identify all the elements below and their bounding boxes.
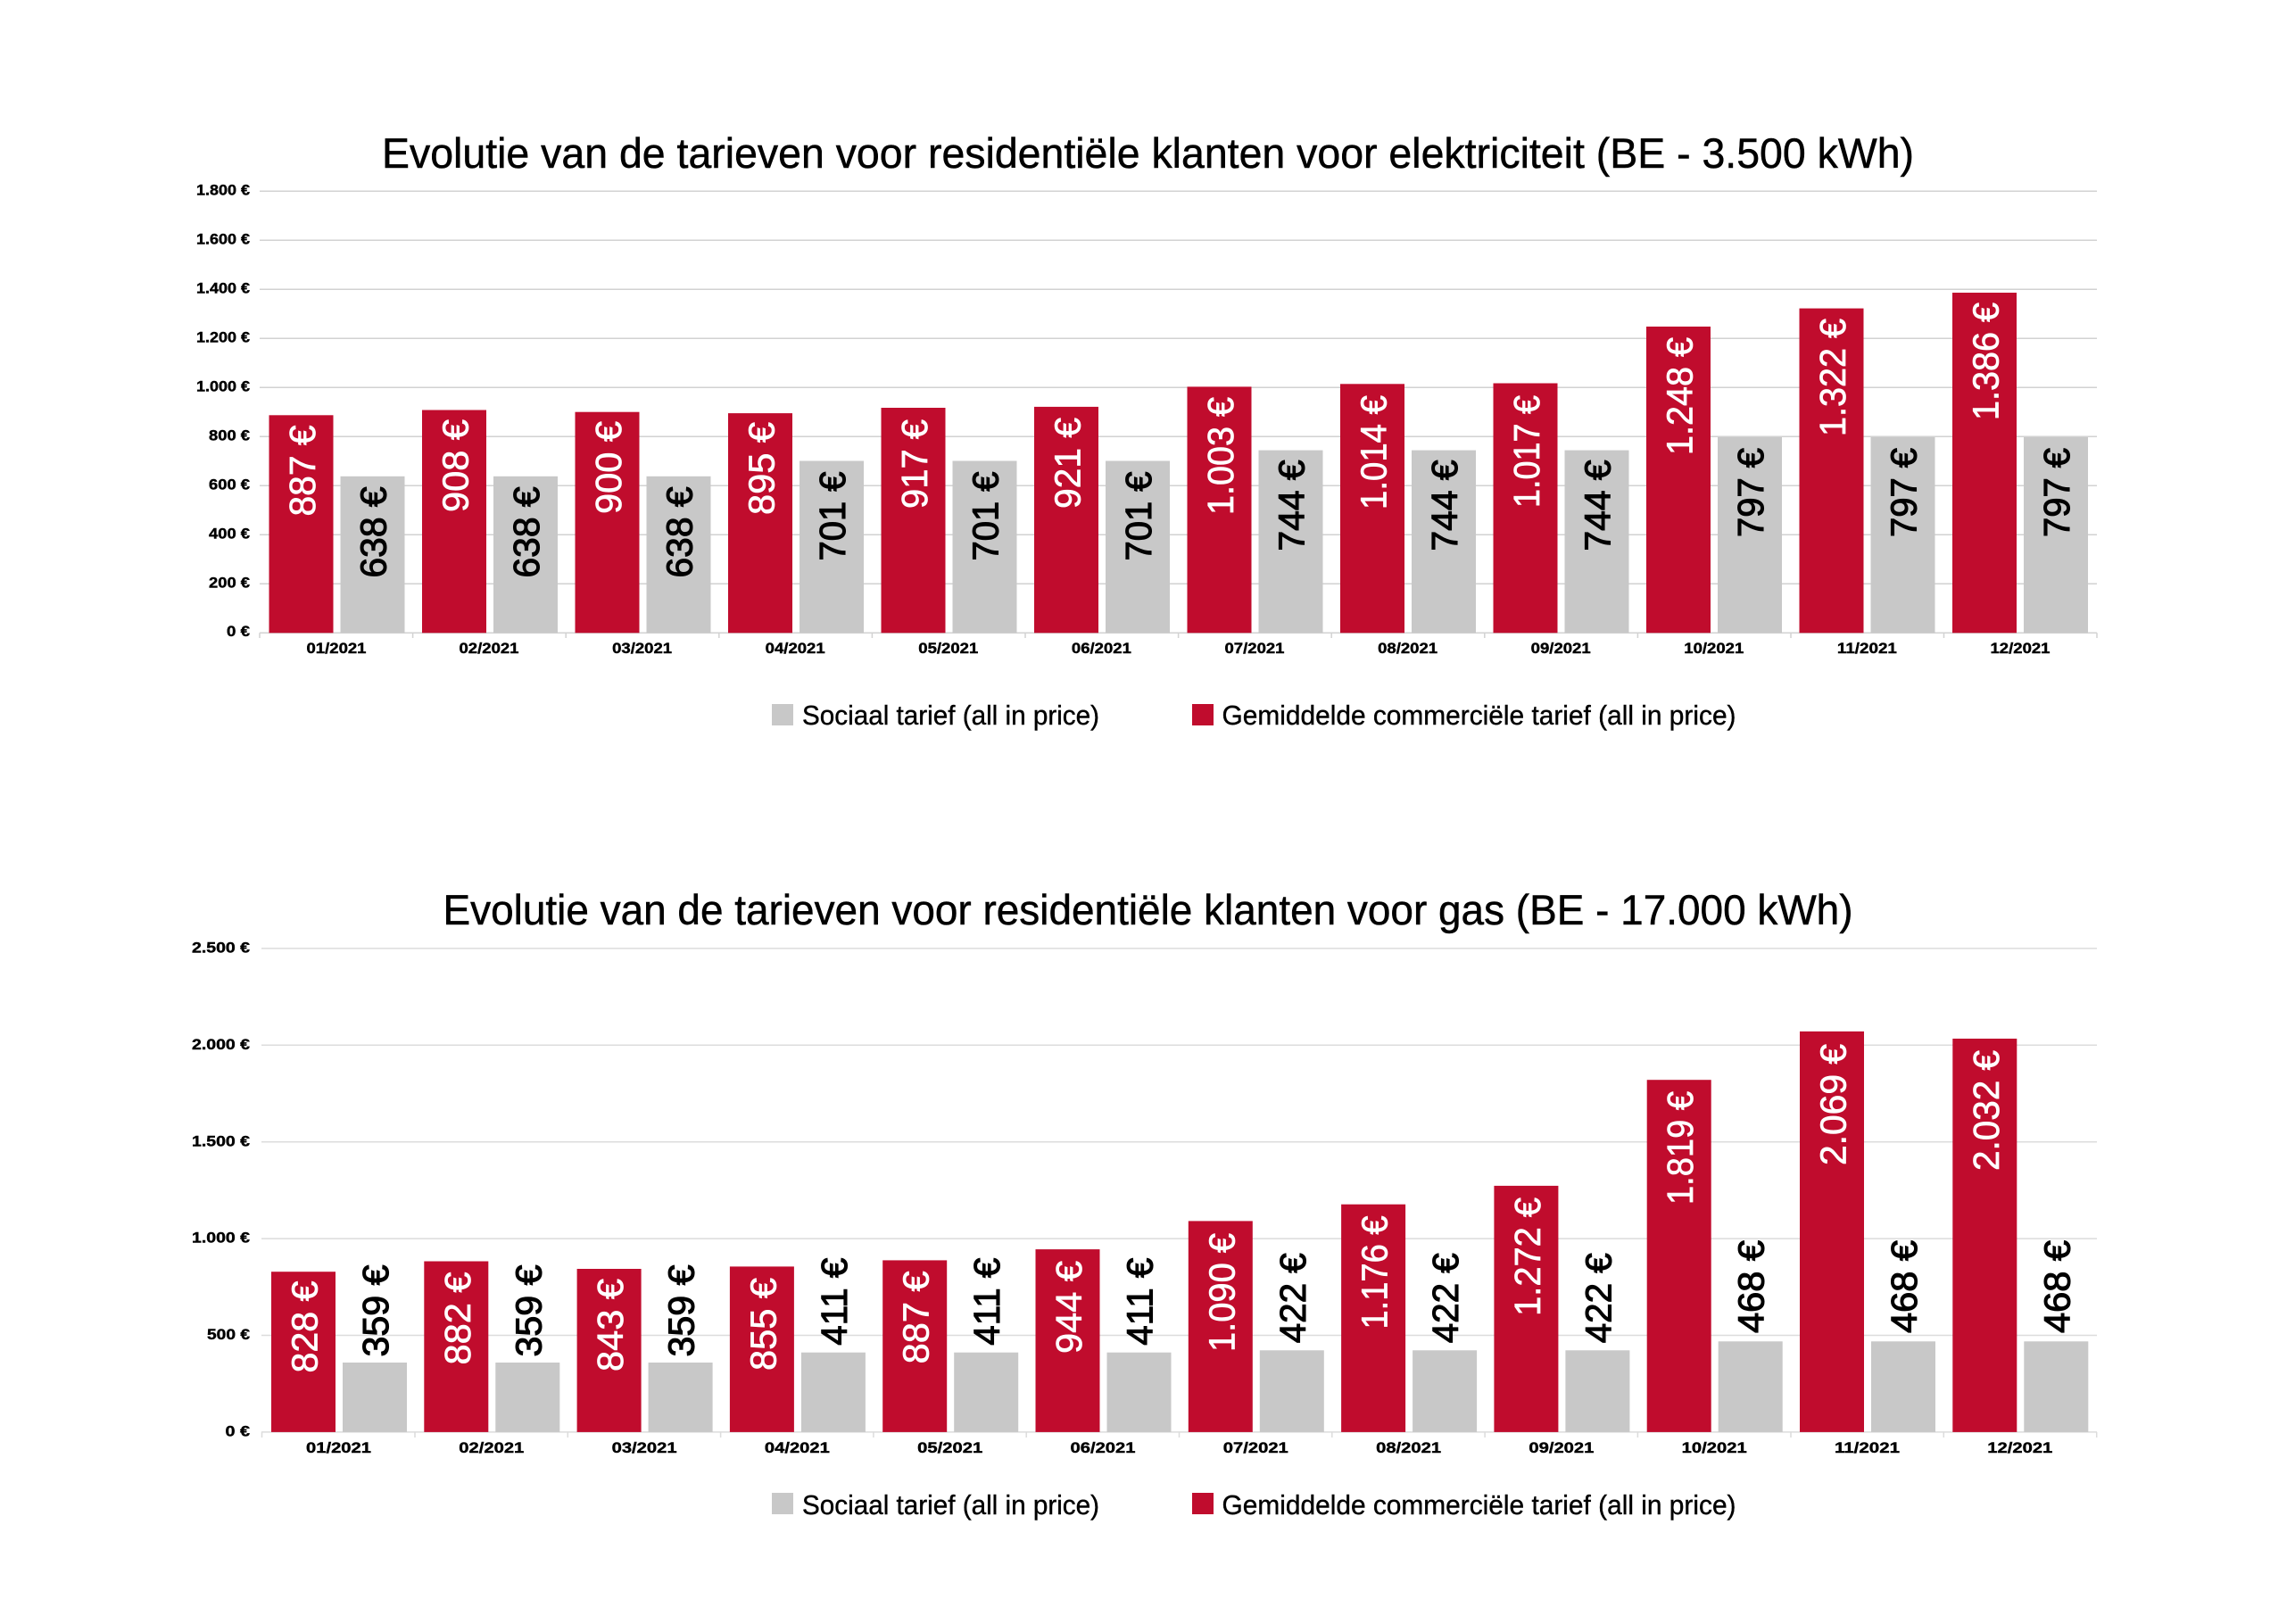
data labels: commercial tariff: 1.386 € [1965, 302, 2006, 420]
data labels: commercial tariff: 1.003 € [1200, 397, 1241, 515]
data labels: commercial tariff: 828 € [284, 1280, 325, 1372]
y axis labels: 1.400 € [196, 280, 250, 296]
x axis labels: 07/2021 [1223, 1440, 1288, 1456]
data labels: social tariff: 744 € [1271, 460, 1312, 551]
data labels: commercial tariff: 2.032 € [1966, 1050, 2007, 1171]
data labels: social tariff [355, 1240, 2077, 1356]
x axis labels: 08/2021 [1378, 641, 1437, 657]
x axis labels: 02/2021 [459, 1440, 524, 1456]
x axis labels: 10/2021 [1684, 641, 1744, 657]
data labels: commercial tariff: 944 € [1048, 1261, 1090, 1354]
data labels: commercial tariff: 917 € [894, 419, 935, 509]
y axis labels [196, 182, 250, 640]
y axis labels: 400 € [209, 526, 250, 543]
legend: electricity [772, 700, 1736, 731]
data labels: social tariff: 701 € [965, 471, 1007, 560]
bars: commercial tariff [269, 293, 2017, 633]
y axis labels: 500 € [207, 1327, 250, 1343]
bars: social tariff [343, 1341, 2088, 1432]
data labels: social tariff: 411 € [966, 1258, 1007, 1346]
bars: commercial tariff [271, 1032, 2017, 1432]
bars: social tariff [341, 437, 2088, 633]
x axis labels: 02/2021 [459, 641, 519, 657]
data labels: commercial tariff: 921 € [1048, 418, 1089, 509]
data labels: social tariff: 422 € [1425, 1253, 1466, 1343]
data labels: social tariff [353, 448, 2077, 578]
data labels: social tariff: 359 € [355, 1264, 396, 1356]
data labels: commercial tariff [282, 302, 2006, 516]
data labels: commercial tariff: 887 € [282, 425, 323, 516]
y axis labels: 1.600 € [196, 232, 250, 248]
legend: gas [772, 1489, 1736, 1520]
data labels: commercial tariff: 1.322 € [1812, 319, 1853, 436]
data labels: commercial tariff: 1.272 € [1507, 1197, 1548, 1316]
legend: electricity: Gemiddelde commerciële tarief (all in price) [1222, 700, 1736, 731]
x axis labels: 04/2021 [765, 1440, 830, 1456]
data labels: social tariff: 797 € [1883, 448, 1924, 537]
data labels: social tariff: 797 € [1730, 448, 1771, 537]
legend: gas: Gemiddelde commerciële tarief (all in price) [1222, 1489, 1736, 1520]
x axis labels: 10/2021 [1682, 1440, 1747, 1456]
y axis labels: 1.800 € [196, 182, 250, 198]
panel: electricity chart [196, 129, 2097, 731]
x axis labels: 06/2021 [1072, 641, 1131, 657]
title: electricity: Evolutie van de tarieven voor residentiële klanten voor elektriciteit (BE - 3.500 kWh) [382, 129, 1914, 177]
x axis labels: 11/2021 [1835, 1440, 1900, 1456]
x axis labels: 11/2021 [1837, 641, 1897, 657]
data labels: commercial tariff: 1.090 € [1201, 1233, 1242, 1352]
data labels: commercial tariff: 1.017 € [1506, 395, 1547, 508]
panel: gas chart [192, 886, 2097, 1520]
x axis labels: 07/2021 [1224, 641, 1285, 657]
y axis labels: 2.500 € [192, 940, 250, 957]
x axis labels: 12/2021 [1987, 1440, 2052, 1456]
data labels: commercial tariff: 1.014 € [1353, 395, 1394, 510]
x axis labels: 09/2021 [1529, 1440, 1594, 1456]
data labels: commercial tariff: 1.819 € [1660, 1091, 1701, 1205]
data labels: commercial tariff: 2.069 € [1813, 1044, 1854, 1165]
data labels: social tariff: 701 € [812, 471, 853, 560]
title: gas: Evolutie van de tarieven voor residentiële klanten voor gas (BE - 17.000 kWh) [443, 886, 1852, 933]
data labels: commercial tariff: 908 € [435, 419, 476, 512]
data labels: social tariff: 411 € [1119, 1258, 1160, 1346]
x axis labels: 01/2021 [306, 1440, 371, 1456]
x axis labels: 05/2021 [918, 641, 978, 657]
legend: gas: Sociaal tarief (all in price) [802, 1489, 1099, 1520]
y axis labels: 1.000 € [196, 378, 250, 394]
data labels: social tariff: 638 € [659, 486, 700, 578]
y axis labels: 0 € [227, 624, 250, 640]
x axis labels: 06/2021 [1071, 1440, 1135, 1456]
y axis labels: 0 € [225, 1424, 250, 1440]
data labels: commercial tariff: 1.176 € [1355, 1215, 1396, 1330]
y axis labels: 200 € [209, 575, 250, 591]
data labels: social tariff: 797 € [2036, 448, 2077, 537]
x axis labels: 12/2021 [1990, 641, 2051, 657]
data labels: commercial tariff [284, 1044, 2007, 1372]
x axis labels: 04/2021 [766, 641, 825, 657]
x axis labels: 09/2021 [1531, 641, 1591, 657]
data labels: social tariff: 422 € [1578, 1253, 1619, 1343]
data labels: social tariff: 701 € [1118, 471, 1159, 560]
y axis labels: 1.500 € [192, 1133, 250, 1149]
data labels: social tariff: 638 € [353, 486, 394, 578]
x axis labels: 03/2021 [612, 1440, 677, 1456]
y axis labels: 2.000 € [192, 1037, 250, 1053]
y axis labels: 1.200 € [196, 330, 250, 346]
data labels: commercial tariff: 900 € [588, 421, 629, 514]
data labels: commercial tariff: 882 € [437, 1272, 478, 1365]
y axis labels: 600 € [209, 476, 250, 493]
x axis labels: 03/2021 [612, 641, 672, 657]
data labels: social tariff: 359 € [661, 1264, 702, 1356]
data labels: social tariff: 638 € [506, 486, 547, 578]
data labels: social tariff: 411 € [814, 1258, 855, 1346]
y axis labels: 800 € [209, 428, 250, 444]
data labels: social tariff: 359 € [508, 1264, 549, 1356]
data labels: social tariff: 744 € [1578, 460, 1619, 551]
x axis labels: 08/2021 [1376, 1440, 1441, 1456]
data labels: commercial tariff: 1.248 € [1660, 337, 1701, 455]
data labels: social tariff: 468 € [1731, 1240, 1772, 1333]
x axis labels [306, 1440, 2052, 1456]
x axis labels: 01/2021 [307, 641, 366, 657]
data labels: commercial tariff: 855 € [742, 1278, 783, 1371]
y axis labels: 1.000 € [192, 1230, 250, 1247]
data labels: social tariff: 744 € [1424, 460, 1465, 551]
x axis labels [307, 641, 2051, 657]
data labels: social tariff: 422 € [1272, 1253, 1313, 1343]
data labels: social tariff: 468 € [1884, 1240, 1925, 1333]
data labels: commercial tariff: 843 € [590, 1279, 631, 1371]
x axis labels: 05/2021 [917, 1440, 982, 1456]
data labels: commercial tariff: 887 € [896, 1271, 937, 1363]
data labels: commercial tariff: 895 € [741, 422, 782, 515]
legend: electricity: Sociaal tarief (all in price) [802, 700, 1099, 731]
data labels: social tariff: 468 € [2036, 1240, 2077, 1333]
y axis labels [192, 940, 250, 1440]
